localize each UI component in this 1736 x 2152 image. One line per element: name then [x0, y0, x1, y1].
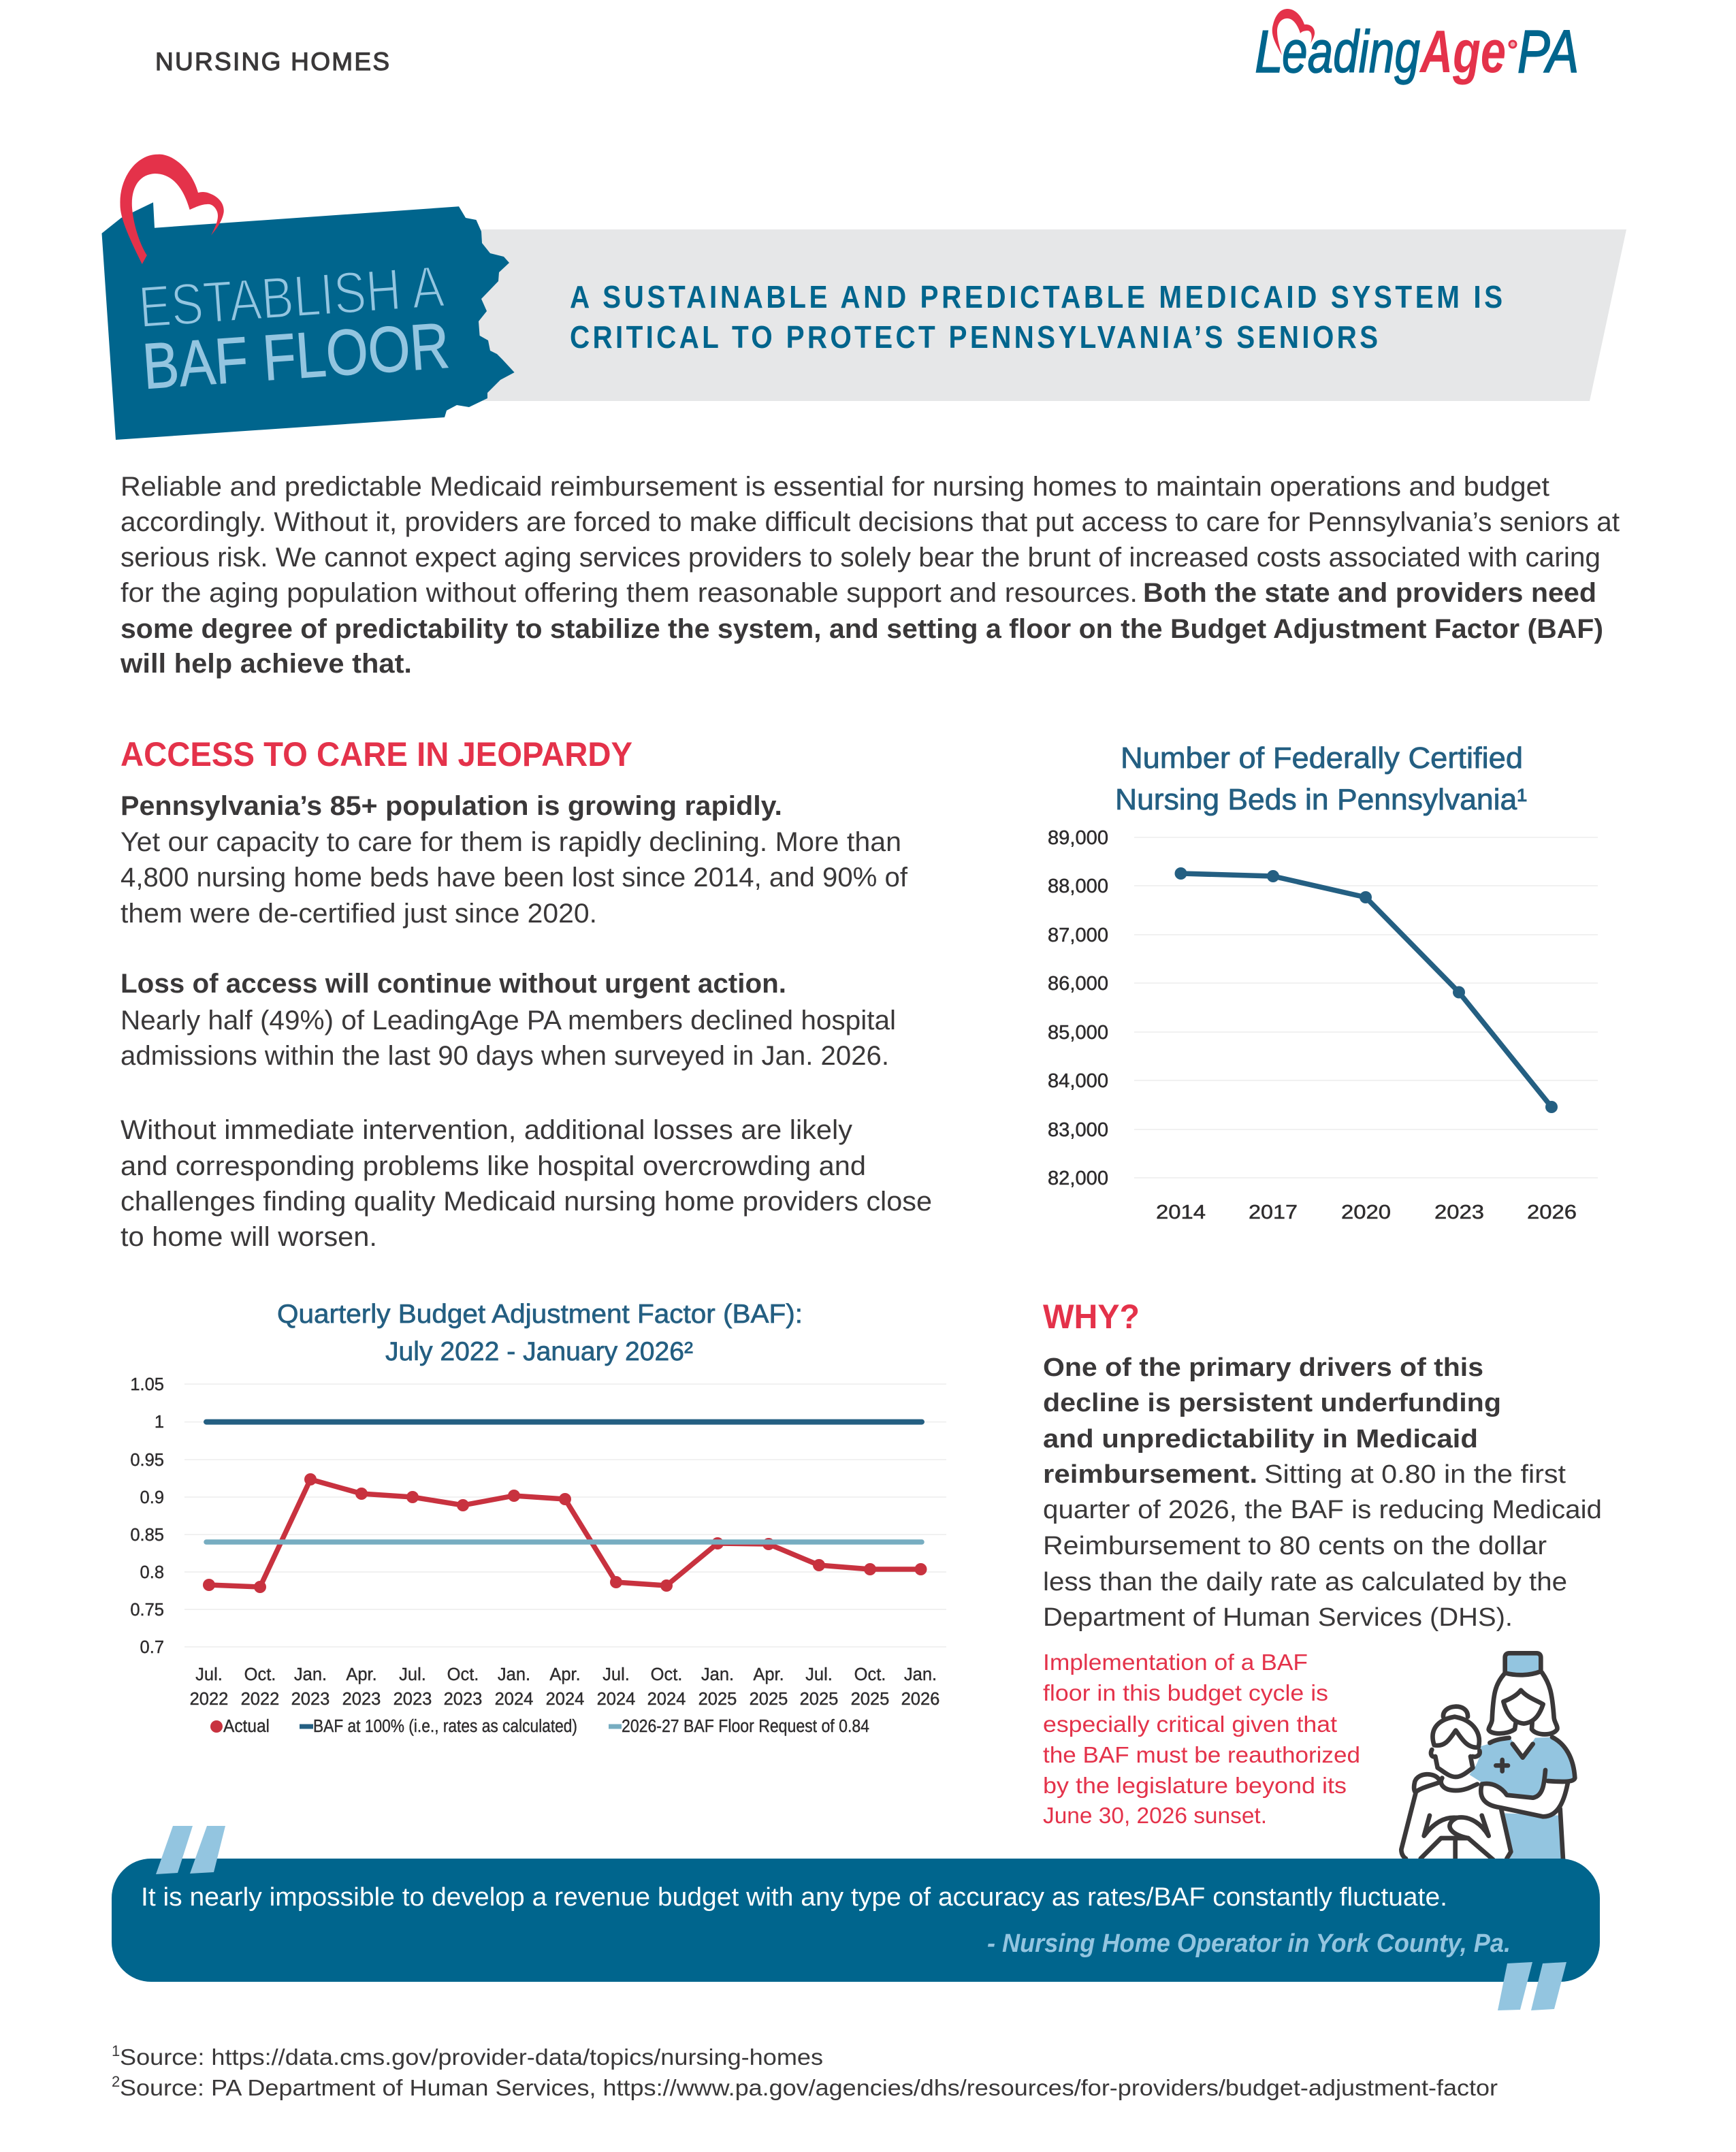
heading: access to care in jeopardy: ACCESS TO CARE IN JEOPARDY [120, 735, 632, 773]
text block: access to care: Loss of access will continue without urgent action. [120, 969, 786, 999]
x axis labels: Jan. [904, 1665, 937, 1684]
text block: why: and unpredictability in Medicaid [1043, 1425, 1478, 1454]
text block: why: quarter of 2026, the BAF is reducing Medicaid [1043, 1496, 1602, 1524]
y axis labels: 84,000 [1048, 1070, 1108, 1092]
x axis labels: Jul. [195, 1665, 223, 1684]
x axis labels: Oct. [447, 1665, 479, 1684]
x axis labels: 2025 [800, 1690, 838, 1709]
logo: LeadingAge PA: PA [1517, 18, 1579, 85]
text block: access to care: admissions within the last 90 days when surveyed in Jan. 2026. [120, 1041, 889, 1071]
icon: nurse with senior [1401, 1653, 1575, 1861]
x axis labels: 2020 [1341, 1202, 1391, 1223]
x axis labels: Apr. [549, 1665, 581, 1684]
x axis labels: 2023 [342, 1690, 381, 1709]
x axis labels: 2017 [1249, 1202, 1298, 1223]
banner headline: CRITICAL TO PROTECT PENNSYLVANIA’S SENIORS [570, 321, 1378, 355]
text block: why: reimbursement. [1043, 1460, 1257, 1489]
y axis labels [1048, 827, 1108, 1189]
red callout text [1043, 1650, 1360, 1828]
intro paragraph: Both the state and providers need [1143, 578, 1596, 608]
chart legend: BAF at 100% (i.e., rates as calculated) [313, 1717, 577, 1736]
x axis labels: 2024 [495, 1690, 533, 1709]
quote attribution: - Nursing Home Operator in York County, Pa. [987, 1929, 1511, 1958]
x axis labels: 2024 [546, 1690, 584, 1709]
text block: why: Department of Human Services (DHS). [1043, 1603, 1513, 1632]
x axis labels: Jul. [805, 1665, 833, 1684]
x axis labels: 2026 [901, 1690, 939, 1709]
y axis labels [130, 1375, 164, 1657]
x axis labels [190, 1665, 939, 1709]
y axis labels: 83,000 [1048, 1119, 1108, 1141]
footnotes: Source: PA Department of Human Services, https://www.pa.gov/agencies/dhs/resources/for-providers/budget-adjustment-factor [120, 2075, 1498, 2100]
data line [1175, 867, 1558, 1113]
intro paragraph: for the aging population without offering them reasonable support and resources. [120, 578, 1138, 608]
text block: why: One of the primary drivers of this [1043, 1353, 1483, 1382]
y axis labels: 0.75 [130, 1601, 164, 1620]
chart title: July 2022 - January 2026² [385, 1337, 693, 1366]
banner strip [470, 229, 1626, 401]
section label: nursing homes: NURSING HOMES [155, 48, 389, 76]
red callout text: the BAF must be reauthorized [1043, 1742, 1360, 1767]
x axis labels: 2022 [190, 1690, 228, 1709]
quote text: It is nearly impossible to develop a revenue budget with any type of accuracy as rates/BAF constantly fluctuate. [141, 1883, 1447, 1912]
x axis labels: 2025 [698, 1690, 737, 1709]
x axis labels: 2024 [647, 1690, 686, 1709]
x axis labels: Apr. [753, 1665, 784, 1684]
y axis labels: 1.05 [130, 1375, 164, 1394]
y axis labels: 0.85 [130, 1526, 164, 1545]
y axis labels: 88,000 [1048, 876, 1108, 897]
chart title: Quarterly Budget Adjustment Factor (BAF): [277, 1300, 803, 1329]
x axis labels: 2026 [1527, 1202, 1577, 1223]
intro paragraph: serious risk. We cannot expect aging services providers to solely bear the brunt of increased costs associated with caring [120, 543, 1601, 573]
red callout text: Implementation of a BAF [1043, 1650, 1308, 1675]
red callout text: floor in this budget cycle is [1043, 1680, 1328, 1705]
x axis labels: Oct. [651, 1665, 682, 1684]
x axis labels: Jan. [294, 1665, 327, 1684]
x axis labels: 2025 [851, 1690, 889, 1709]
y axis labels: 1 [155, 1413, 164, 1432]
x axis labels: Oct. [854, 1665, 886, 1684]
y axis labels: 0.9 [140, 1488, 164, 1507]
text block: access to care: to home will worsen. [120, 1222, 377, 1252]
x axis labels: Oct. [244, 1665, 276, 1684]
icon: closing quotation mark [1498, 1962, 1566, 2010]
y axis labels: 0.7 [140, 1638, 164, 1657]
intro paragraph: accordingly. Without it, providers are forced to make difficult decisions that put access to care for Pennsylvania’s seniors at [120, 507, 1620, 537]
logo: LeadingAge PA: Age [1419, 18, 1506, 85]
text block: access to care [120, 791, 932, 1252]
Pennsylvania state shape with title: BAF FLOOR [140, 310, 451, 403]
Pennsylvania state shape with title [102, 155, 515, 440]
x axis labels: 2023 [393, 1690, 432, 1709]
chart legend [210, 1717, 869, 1736]
chart: federally certified nursing beds [1048, 741, 1598, 1223]
y axis labels: 82,000 [1048, 1168, 1108, 1189]
logo: LeadingAge PA: L [1255, 18, 1283, 85]
heading: why: WHY? [1043, 1298, 1140, 1336]
logo: LeadingAge PA: eading [1282, 19, 1420, 85]
intro paragraph [120, 472, 1620, 679]
y axis labels: 0.95 [130, 1451, 164, 1470]
x axis labels: Jan. [701, 1665, 734, 1684]
x axis labels: 2014 [1156, 1202, 1206, 1223]
text block: why: decline is persistent underfunding [1043, 1389, 1501, 1417]
y axis labels: 85,000 [1048, 1022, 1108, 1044]
Pennsylvania state shape with title: ESTABLISH A [137, 254, 447, 340]
chart title [277, 1300, 803, 1366]
text block: why [1043, 1353, 1602, 1632]
x axis labels: 2022 [241, 1690, 279, 1709]
x axis labels: Jan. [498, 1665, 530, 1684]
chart title: Nursing Beds in Pennsylvania¹ [1115, 783, 1527, 816]
red callout text: June 30, 2026 sunset. [1043, 1803, 1267, 1828]
y axis labels: 89,000 [1048, 827, 1108, 849]
x axis labels: 2024 [597, 1690, 635, 1709]
footnotes [112, 2042, 1498, 2100]
red callout text: by the legislature beyond its [1043, 1773, 1347, 1798]
text block: why: Sitting at 0.80 in the first [1264, 1460, 1566, 1489]
banner headline [570, 280, 1502, 355]
banner headline: A SUSTAINABLE AND PREDICTABLE MEDICAID SYSTEM IS [570, 280, 1502, 315]
line: BAF at 100% [206, 1419, 922, 1425]
text block: access to care: Without immediate intervention, additional losses are likely [120, 1115, 852, 1145]
x axis labels [1156, 1202, 1577, 1223]
quote box [112, 1826, 1600, 2010]
y axis labels: 86,000 [1048, 973, 1108, 995]
intro paragraph: some degree of predictability to stabilize the system, and setting a floor on the Budget Adjustment Factor (BAF) [120, 614, 1603, 644]
x axis labels: 2023 [444, 1690, 482, 1709]
chart legend: 2026-27 BAF Floor Request of 0.84 [622, 1717, 869, 1736]
x axis labels: Jul. [602, 1665, 630, 1684]
text block: access to care: and corresponding problems like hospital overcrowding and [120, 1151, 866, 1181]
chart legend: Actual [223, 1717, 270, 1736]
text block: access to care: Nearly half (49%) of LeadingAge PA members declined hospital [120, 1006, 896, 1035]
text block: access to care: Pennsylvania’s 85+ population is growing rapidly. [120, 791, 782, 821]
icon: opening quotation mark [156, 1826, 225, 1874]
text block: access to care: 4,800 nursing home beds have been lost since 2014, and 90% of [120, 863, 908, 893]
y axis labels: 0.8 [140, 1563, 164, 1582]
x axis labels: 2025 [750, 1690, 788, 1709]
intro paragraph: will help achieve that. [120, 649, 412, 679]
text block: access to care: challenges finding quality Medicaid nursing home providers close [120, 1187, 932, 1217]
line: BAF floor request [206, 1539, 922, 1545]
logo: LeadingAge PA [1255, 9, 1579, 85]
footnotes: Source: https://data.cms.gov/provider-data/topics/nursing-homes [120, 2044, 823, 2070]
text block: access to care: Yet our capacity to care for them is rapidly declining. More than [120, 827, 901, 857]
text block: access to care: them were de-certified just since 2020. [120, 899, 597, 929]
text block: why: Reimbursement to 80 cents on the dollar [1043, 1532, 1547, 1560]
line: actual BAF [203, 1473, 927, 1593]
red callout text: especially critical given that [1043, 1712, 1337, 1737]
x axis labels: 2023 [291, 1690, 329, 1709]
text block: why: less than the daily rate as calculated by the [1043, 1568, 1567, 1596]
chart title: Number of Federally Certified [1121, 741, 1523, 775]
intro paragraph: Reliable and predictable Medicaid reimbursement is essential for nursing homes to maintain operations and budget [120, 472, 1549, 502]
chart title [1115, 741, 1527, 816]
x axis labels: Apr. [346, 1665, 377, 1684]
x axis labels: Jul. [399, 1665, 426, 1684]
footnotes: 2 [112, 2073, 120, 2090]
y axis labels: 87,000 [1048, 925, 1108, 946]
x axis labels: 2023 [1434, 1202, 1484, 1223]
footnotes: 1 [112, 2042, 120, 2059]
chart: quarterly budget adjustment factor [130, 1300, 946, 1736]
